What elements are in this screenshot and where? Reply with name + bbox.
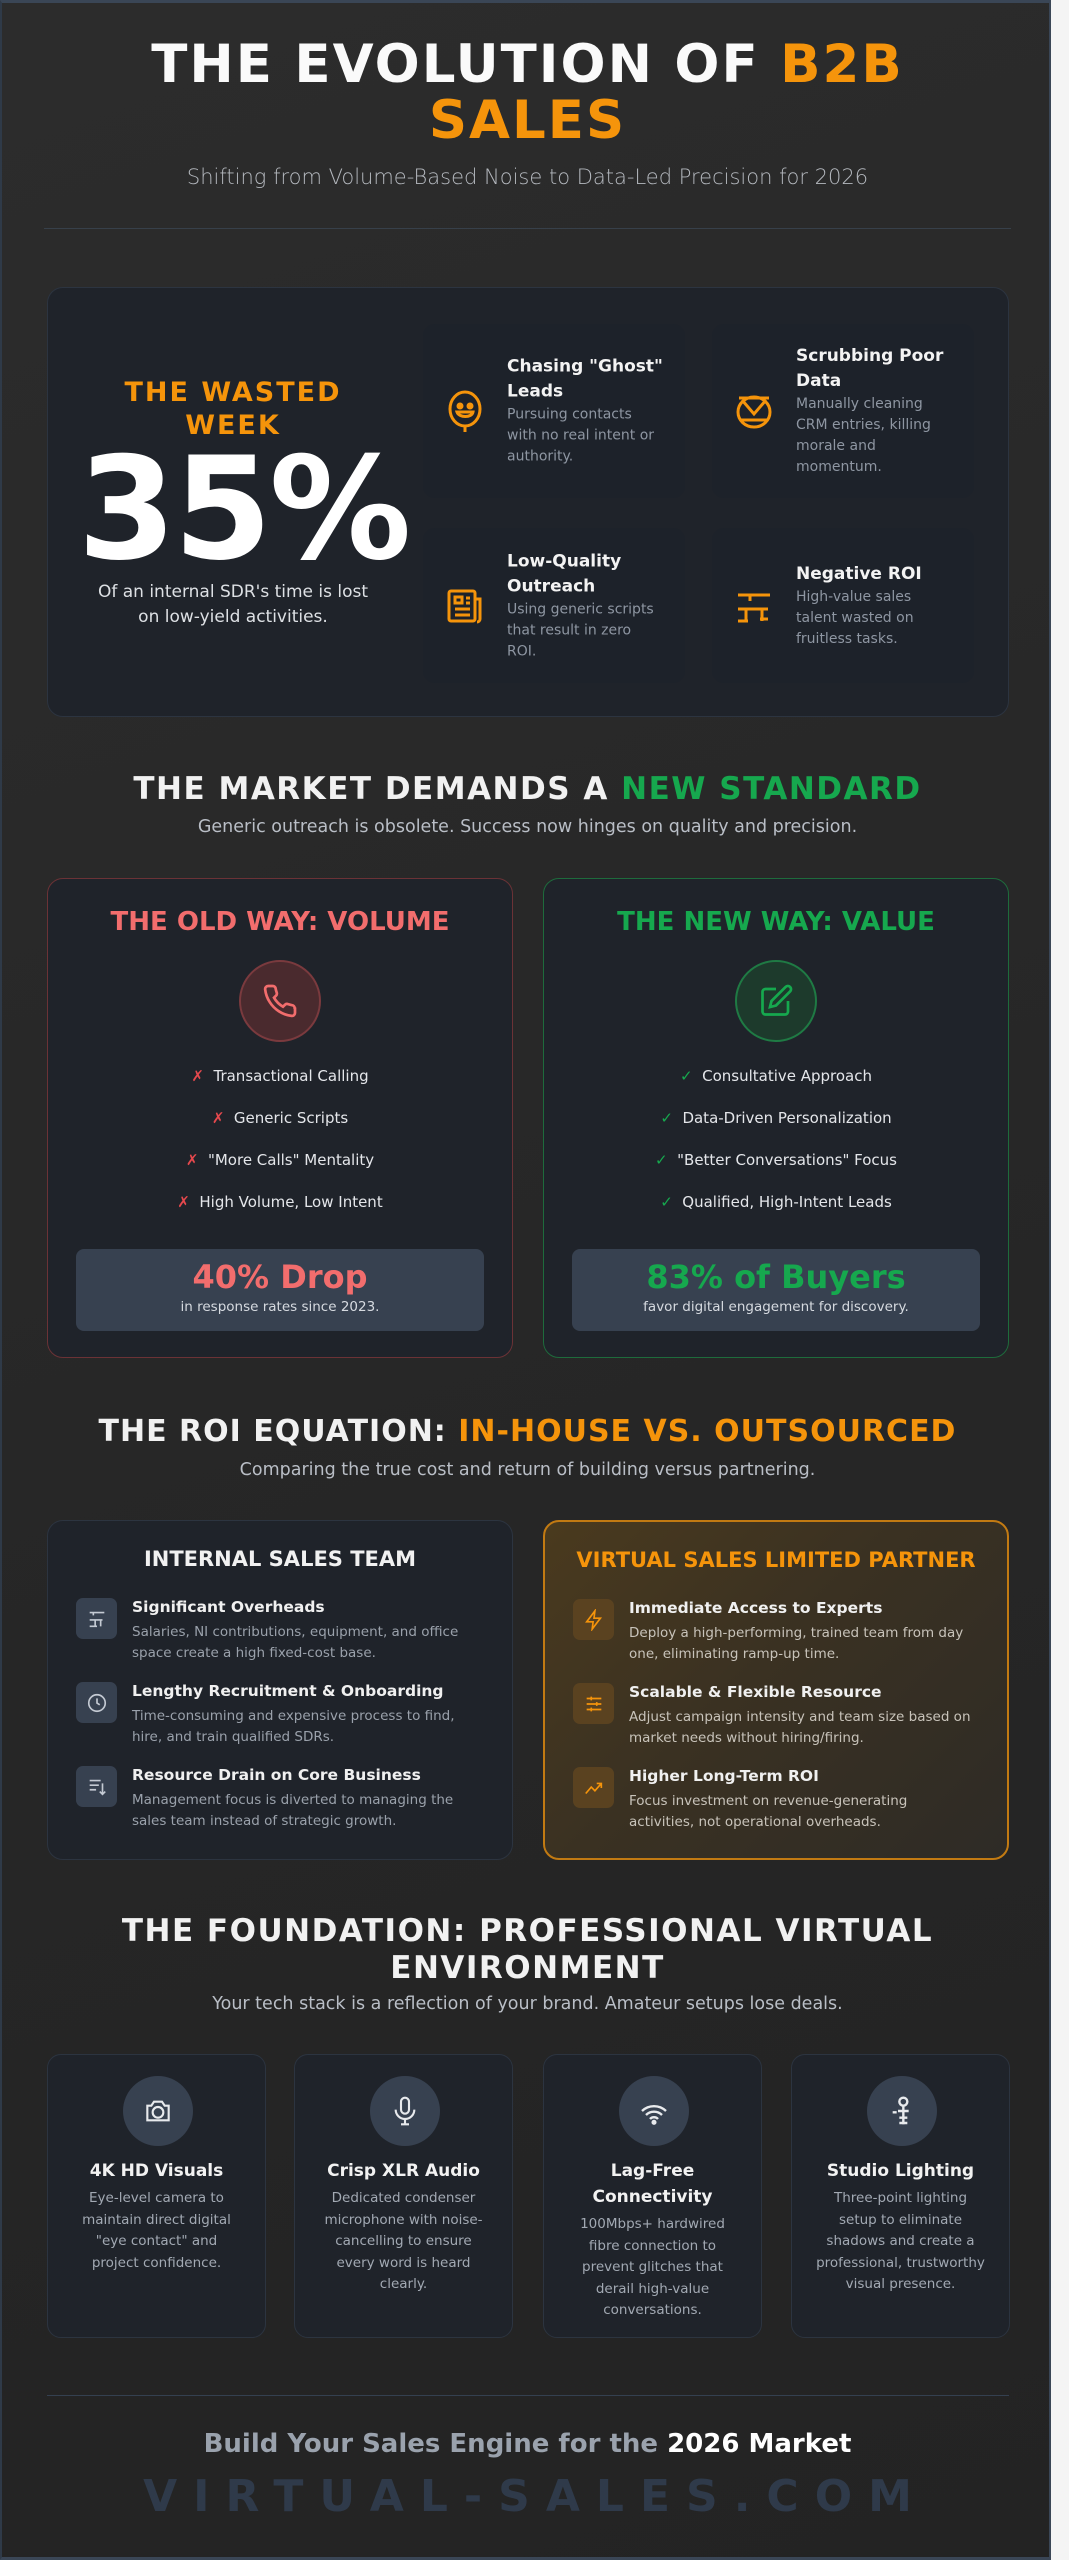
subheading: Your tech stack is a reflection of your brand. Amateur setups lose deals.	[212, 1994, 843, 2014]
icon: ghost	[448, 390, 482, 432]
icon: newspaper	[448, 590, 482, 624]
footer brand: VIRTUAL-SALES.COM	[143, 2471, 928, 2522]
item: recruitment: Time-consuming and expensive process to find, hire, and train qualified SDRs.	[132, 1708, 455, 1745]
icon: phone	[239, 960, 321, 1042]
item: overheads: Significant Overheads	[132, 1598, 325, 1616]
title: SALES	[429, 90, 626, 151]
heading: foundation: ENVIRONMENT	[390, 1950, 665, 1986]
card: ghost leads: Chasing "Ghost" Leads	[507, 356, 663, 402]
tile: 4k visuals: Eye-level camera to maintain direct digital "eye contact" and project confidence.	[82, 2190, 231, 2270]
item: experts: Deploy a high-performing, trained team from day one, eliminating ramp-up time.	[629, 1625, 963, 1662]
panel: virtual sales partner	[543, 1520, 1009, 1860]
item: recruitment: Lengthy Recruitment & Onboarding	[132, 1682, 444, 1700]
title: THE EVOLUTION OF B2B	[151, 34, 904, 95]
card: negative roi: Negative ROI	[796, 564, 922, 584]
panel: new way	[543, 878, 1009, 1358]
stat: 83% of buyers: favor digital engagement for discovery.	[643, 1299, 909, 1315]
heading: the wasted week: WEEK	[185, 410, 281, 441]
title	[151, 34, 904, 151]
item: recruitment	[76, 1682, 455, 1745]
item: resource drain: Resource Drain on Core Business	[132, 1766, 421, 1784]
list: new way items: ✓ "Better Conversations" Focus	[655, 1151, 897, 1169]
card: low-quality outreach: Using generic scripts that result in zero ROI.	[507, 601, 654, 659]
footer cta: Build Your Sales Engine for the 2026 Market	[204, 2429, 851, 2459]
panel: old way	[47, 878, 513, 1358]
item: resource drain: Management focus is diverted to managing the sales team instead of strategic growth.	[132, 1792, 453, 1829]
heading: foundation	[122, 1913, 933, 1986]
stat description: Of an internal SDR's time is lost on low-yield activities.	[98, 582, 368, 627]
heading: roi equation: THE ROI EQUATION: IN-HOUSE VS. OUTSOURCED	[99, 1414, 956, 1449]
tile: connectivity: 100Mbps+ hardwired fibre connection to prevent glitches that derail high-value conversations.	[580, 2216, 725, 2318]
card: ghost leads	[423, 324, 685, 498]
card: low-quality outreach: Low-Quality Outreach	[507, 551, 621, 596]
card: scrubbing poor data: Scrubbing Poor Data	[796, 346, 943, 391]
heading: the wasted week: THE WASTED	[124, 377, 342, 408]
stat: 40% drop: in response rates since 2023.	[181, 1299, 379, 1315]
card: scrubbing poor data: Manually cleaning CRM entries, killing morale and momentum.	[796, 396, 931, 475]
big stat 35%: 35%	[78, 427, 408, 592]
list: old way items: ✗ High Volume, Low Intent	[177, 1193, 383, 1211]
stat: 83% of buyers	[572, 1249, 980, 1331]
icon: pencil	[735, 960, 817, 1042]
tile: connectivity: Connectivity	[592, 2187, 713, 2207]
list: old way items: ✗ "More Calls" Mentality	[186, 1151, 374, 1169]
card: scrubbing poor data	[712, 324, 974, 498]
list: old way items: ✗ Transactional Calling	[191, 1067, 369, 1085]
heading: INTERNAL SALES TEAM	[144, 1547, 416, 1571]
stat: 40% drop	[76, 1249, 484, 1331]
stat: 83% of buyers: 83% of Buyers	[646, 1258, 906, 1296]
list: new way items: ✓ Data-Driven Personalization	[660, 1109, 892, 1127]
tile: studio lighting: Studio Lighting	[827, 2161, 974, 2181]
stat: 40% drop: 40% Drop	[193, 1258, 367, 1296]
heading: VIRTUAL SALES LIMITED PARTNER	[576, 1548, 976, 1572]
item: experts: Immediate Access to Experts	[629, 1599, 882, 1617]
tile: 4k visuals: 4K HD Visuals	[90, 2161, 223, 2181]
card: ghost leads: Pursuing contacts with no real intent or authority.	[507, 406, 654, 464]
icon: desk	[738, 594, 770, 622]
list: new way items	[655, 1067, 897, 1211]
item: experts	[573, 1599, 963, 1662]
card: negative roi: High-value sales talent wasted on fruitless tasks.	[796, 588, 914, 646]
subheading: Comparing the true cost and return of building versus partnering.	[240, 1460, 815, 1480]
item: overheads	[76, 1598, 458, 1661]
heading: old way: THE OLD WAY: VOLUME	[111, 907, 449, 937]
card: negative roi	[712, 528, 974, 683]
item: roi: Focus investment on revenue-generating activities, not operational overheads.	[629, 1793, 907, 1830]
list: new way items: ✓ Qualified, High-Intent Leads	[660, 1193, 892, 1211]
item: overheads: Salaries, NI contributions, equipment, and office space create a high fixed-cost base.	[132, 1624, 458, 1661]
heading: new way: THE NEW WAY: VALUE	[617, 907, 935, 937]
heading: foundation: THE FOUNDATION: PROFESSIONAL VIRTUAL	[122, 1913, 933, 1949]
item: roi	[573, 1767, 907, 1830]
list: new way items: ✓ Consultative Approach	[680, 1067, 872, 1085]
tile: xlr audio	[294, 2054, 513, 2338]
tile: xlr audio: Dedicated condenser microphone with noise-cancelling to ensure every word is heard clearly.	[324, 2190, 483, 2292]
tile: connectivity: Lag-Free	[611, 2161, 694, 2181]
tile: 4k visuals	[47, 2054, 266, 2338]
tile: xlr audio: Crisp XLR Audio	[327, 2161, 480, 2181]
icon: envelope	[736, 396, 772, 428]
subtitle: Shifting from Volume-Based Noise to Data-Led Precision for 2026	[187, 165, 868, 189]
panel: wasted week	[47, 287, 1009, 717]
subheading: Generic outreach is obsolete. Success now hinges on quality and precision.	[198, 817, 857, 837]
item: scalable	[573, 1683, 970, 1746]
tile: connectivity	[543, 2054, 762, 2338]
item: scalable: Adjust campaign intensity and team size based on market needs without hiring/firing.	[629, 1709, 970, 1746]
list: old way items: ✗ Generic Scripts	[212, 1109, 348, 1127]
item: roi: Higher Long-Term ROI	[629, 1767, 819, 1785]
item: resource drain	[76, 1766, 453, 1829]
tile: studio lighting: Three-point lighting setup to eliminate shadows and create a professional, trustworthy visual presence.	[816, 2190, 985, 2292]
heading: the wasted week	[124, 377, 342, 441]
heading: market demands: THE MARKET DEMANDS A NEW STANDARD	[133, 771, 922, 807]
list: old way items	[177, 1067, 383, 1211]
tile: studio lighting	[791, 2054, 1010, 2338]
item: scalable: Scalable & Flexible Resource	[629, 1683, 882, 1701]
card: low-quality outreach	[423, 528, 685, 683]
panel: internal sales team	[47, 1520, 513, 1860]
